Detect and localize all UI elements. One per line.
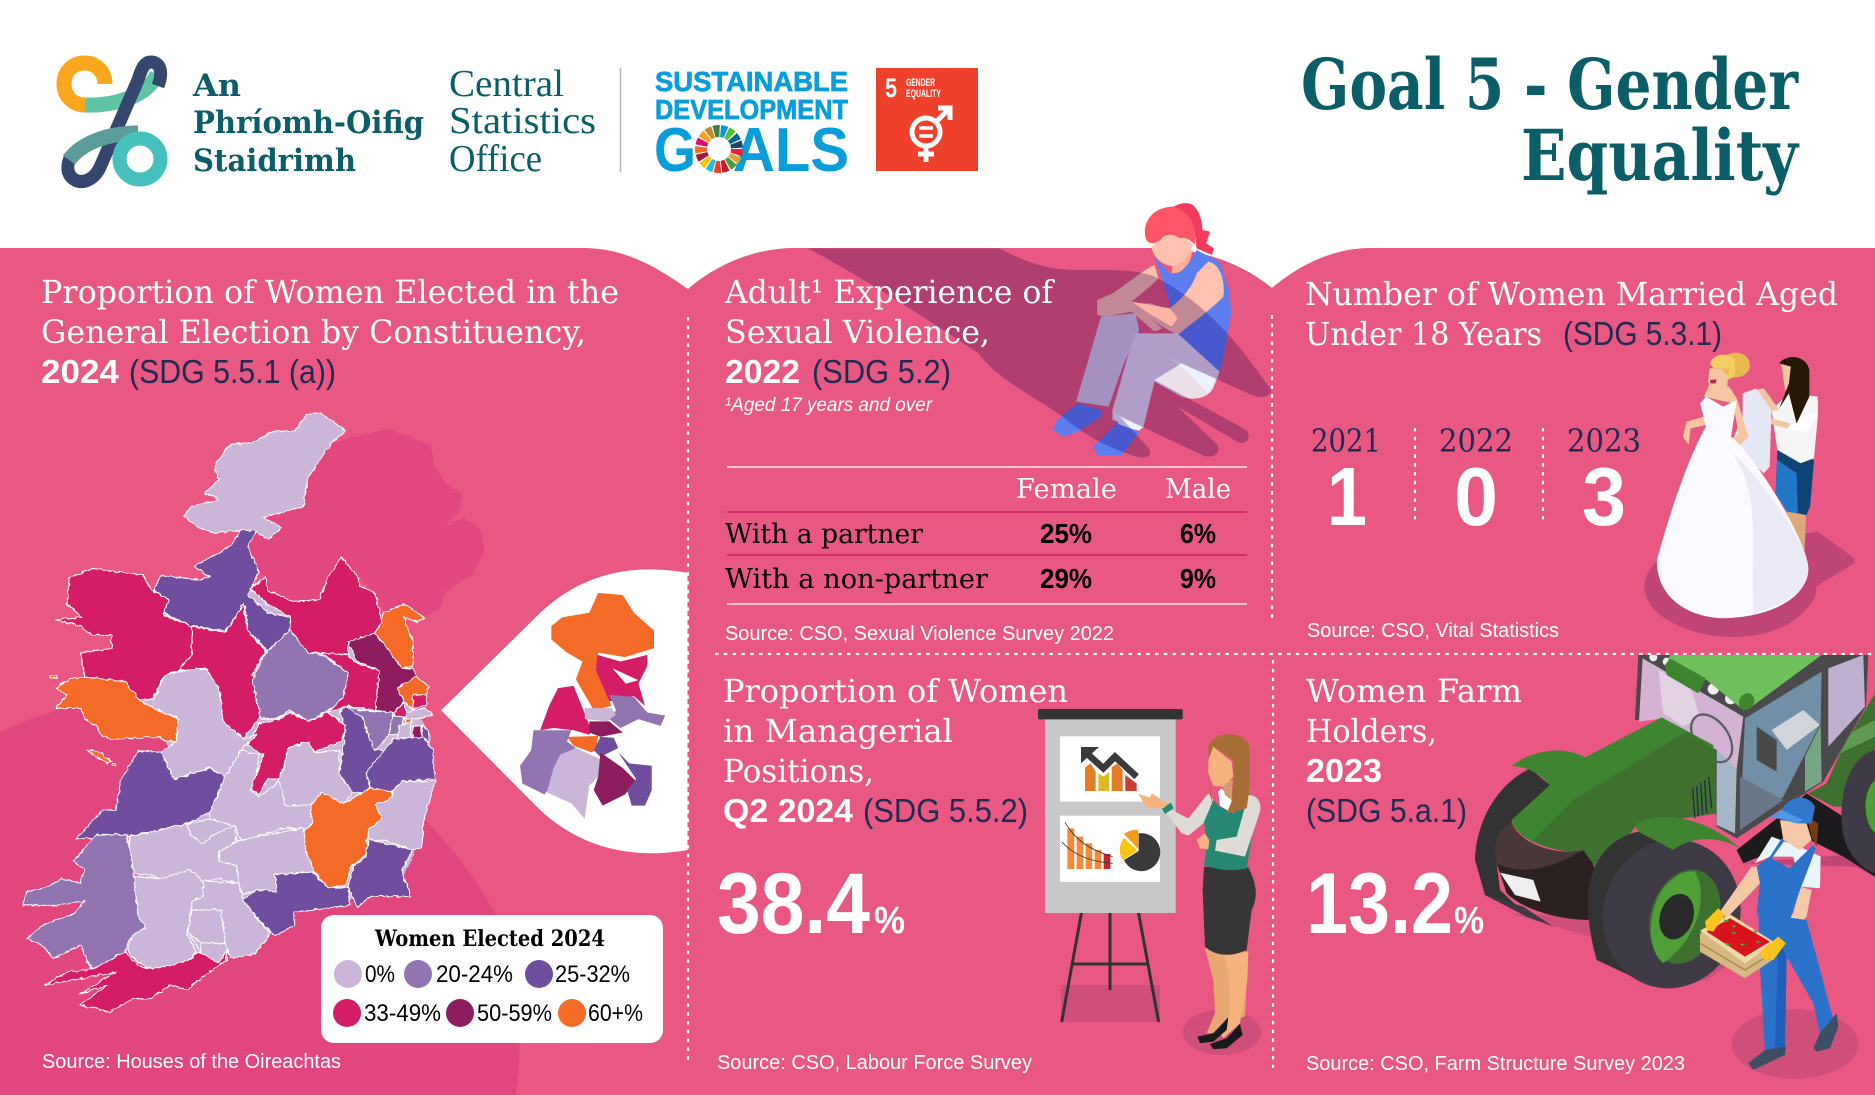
source: Source: CSO, Farm Structure Survey 2023: [1306, 1053, 1685, 1075]
icon: SDG 5 gender equality tile: 5: [885, 73, 897, 103]
heading: Under 18 Years: [1305, 315, 1542, 353]
pink background panels: [0, 248, 1875, 1095]
heading: Number of Women Married Aged: [1305, 275, 1838, 313]
table: Male: [1165, 474, 1231, 505]
logo: Sustainable Development Goals: [654, 66, 849, 185]
header logo: CSO: [64, 62, 596, 181]
heading: [723, 672, 1068, 829]
big number: %: [1454, 900, 1484, 942]
map backdrop circle: [0, 695, 519, 1095]
legend: 33-49%: [364, 1000, 441, 1027]
legend: 0%: [365, 961, 395, 988]
table: 29%: [1040, 563, 1092, 594]
Irish name: Phríomh-Oifig: [193, 105, 424, 141]
heading: (SDG 5.a.1): [1306, 792, 1467, 829]
table: 9%: [1180, 563, 1216, 594]
logo: Sustainable Development Goals: ALS: [733, 116, 849, 185]
map: constituencies of Ireland: [22, 413, 484, 1012]
heading: Proportion of Women: [723, 672, 1068, 710]
heading: (SDG 5.5.1 (a)): [129, 353, 336, 390]
yearly counts: [1311, 422, 1641, 543]
yearly counts: 2021: [1311, 422, 1381, 460]
heading: 2023: [1306, 752, 1382, 789]
yearly counts: 0: [1454, 450, 1498, 543]
Irish name: [192, 68, 424, 179]
heading: 2024: [41, 353, 120, 390]
heading: Q2 2024: [723, 792, 854, 829]
icon: SDG colour wheel: [694, 124, 744, 174]
legend: 60+%: [588, 1000, 643, 1027]
callout: Dublin inset: [441, 569, 687, 853]
source: Source: CSO, Vital Statistics: [1307, 620, 1559, 642]
icon: SDG 5 gender equality tile: EQUALITY: [906, 88, 941, 100]
source: Source: Houses of the Oireachtas: [42, 1051, 341, 1073]
yearly counts: 3: [1582, 450, 1626, 543]
icon: SDG 5 gender equality tile: [876, 68, 978, 171]
yearly counts: 1: [1327, 450, 1367, 543]
panel: sexual violence: [724, 203, 1271, 645]
table: [725, 467, 1247, 604]
heading: Positions,: [723, 752, 874, 790]
table: Female: [1016, 474, 1117, 505]
big number: 38.4: [717, 856, 870, 952]
English name: Statistics: [449, 100, 596, 142]
footnote: ¹Aged 17 years and over: [725, 395, 933, 416]
table: With a non-partner: [725, 564, 988, 595]
English name: Central: [449, 63, 564, 105]
legend: 50-59%: [477, 1000, 552, 1027]
big number: %: [874, 900, 905, 942]
heading: [724, 273, 1055, 390]
table: 25%: [1040, 518, 1092, 549]
heading: (SDG 5.2): [812, 353, 951, 390]
heading: [1305, 275, 1838, 353]
heading: Holders,: [1306, 712, 1437, 750]
English name: [449, 63, 596, 180]
logo: Sustainable Development Goals: DEVELOPMENT: [655, 94, 848, 125]
icon: SDG 5 gender equality tile: GENDER: [906, 77, 935, 89]
table: 6%: [1180, 518, 1216, 549]
yearly counts: 2023: [1567, 422, 1641, 460]
source: Source: CSO, Labour Force Survey: [717, 1052, 1032, 1074]
illustration: tractor and farmer: [1475, 653, 1875, 1079]
heading: 2022: [725, 353, 800, 390]
Irish name: An: [192, 68, 241, 104]
big number: 13.2: [1306, 856, 1453, 952]
source: Source: CSO, Sexual Violence Survey 2022: [725, 623, 1114, 645]
heading: (SDG 5.5.2): [863, 792, 1028, 829]
panel: women married under 18: [1305, 275, 1854, 642]
table: With a partner: [725, 519, 923, 550]
panel: women farm holders: [1306, 653, 1875, 1079]
heading: Sexual Violence,: [725, 313, 990, 351]
heading: Proportion of Women Elected in the: [41, 273, 619, 311]
English name: Office: [449, 138, 542, 180]
legend: 25-32%: [555, 961, 630, 988]
panel: women elected by constituency: [22, 273, 687, 1073]
heading: Women Farm: [1306, 672, 1522, 710]
heading: [1306, 672, 1522, 829]
logo: Sustainable Development Goals: G: [654, 116, 696, 185]
heading: Adult¹ Experience of: [724, 273, 1055, 311]
yearly counts: 2022: [1439, 422, 1513, 460]
heading: in Managerial: [723, 712, 953, 750]
title: Equality: [1521, 114, 1800, 197]
icon: CSO knot: [64, 62, 161, 181]
legend: Women Elected 2024: [374, 926, 605, 952]
heading: (SDG 5.3.1): [1563, 315, 1722, 352]
panel: women in managerial positions: [717, 672, 1261, 1074]
illustration: presenter and easel: [1038, 709, 1261, 1055]
Irish name: Staidrimh: [193, 143, 356, 179]
heading: [41, 273, 619, 390]
title: [1301, 43, 1800, 197]
legend: 20-24%: [436, 961, 513, 988]
illustration: bride and dresser: [1644, 353, 1854, 637]
illustration: seated woman with shadow: [808, 203, 1271, 457]
legend: [321, 915, 663, 1043]
logo: Sustainable Development Goals: SUSTAINABLE: [655, 66, 848, 97]
heading: General Election by Constituency,: [41, 313, 586, 351]
